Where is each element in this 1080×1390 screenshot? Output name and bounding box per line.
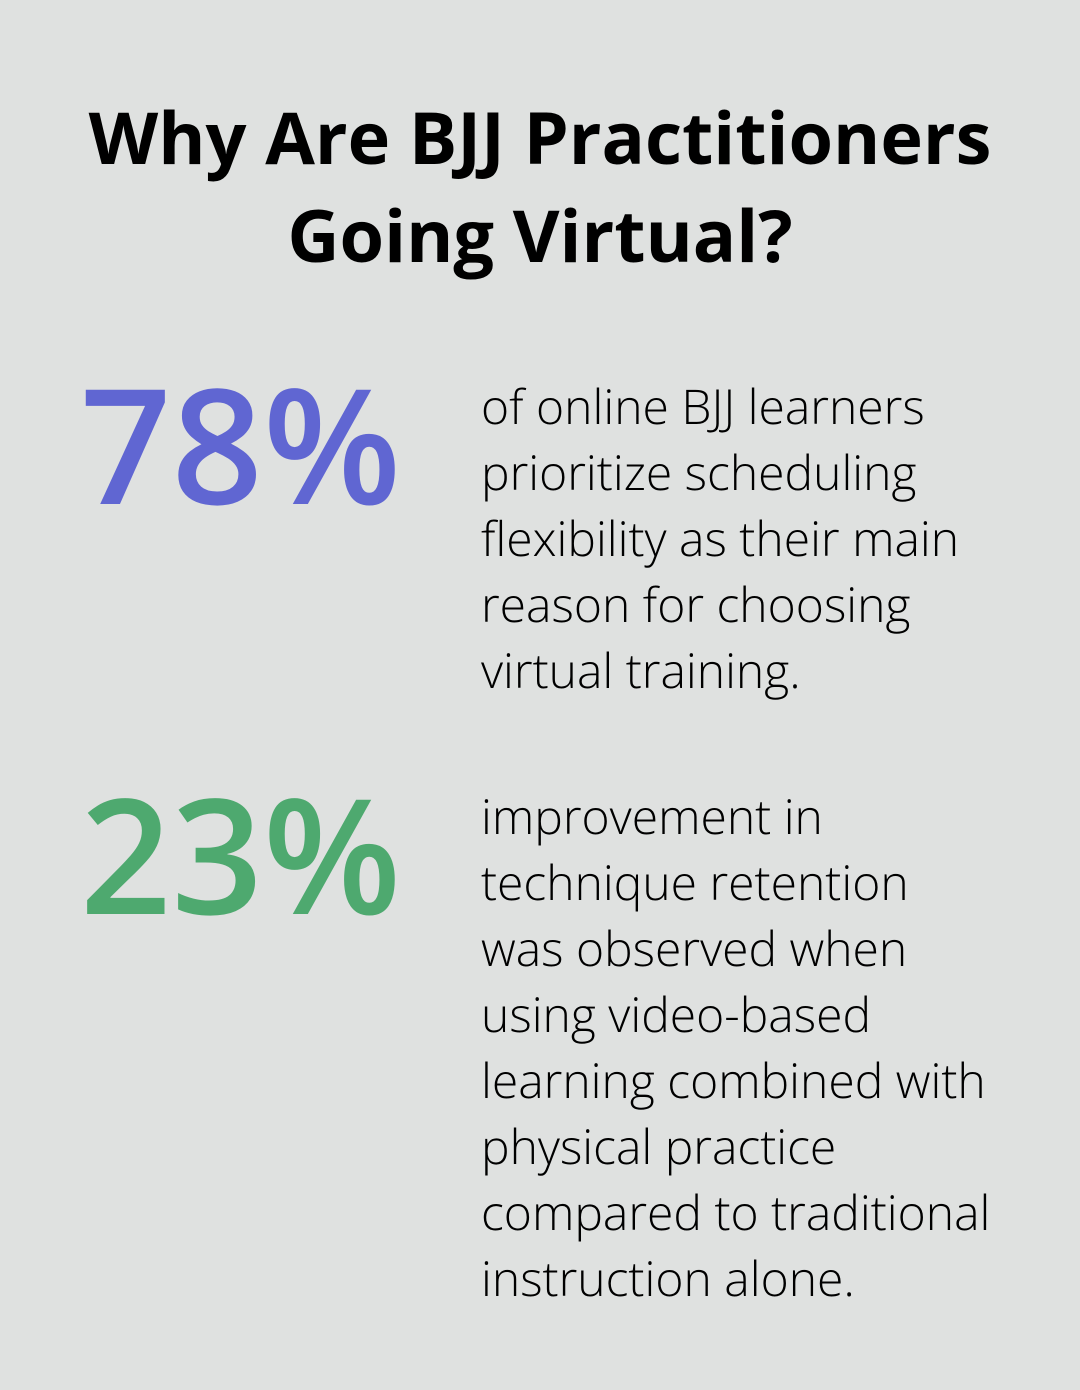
title: Going Virtual? — [287, 186, 793, 284]
stat: 78%: 78% — [80, 333, 401, 551]
text block: 23% description: improvement in — [481, 784, 823, 849]
text block: 23% description: physical practice — [481, 1114, 836, 1179]
text block: 23% description: using video-based — [481, 982, 871, 1047]
title: Why Are BJJ Practitioners — [89, 88, 991, 186]
text block: 78% description: of online BJJ learners — [481, 374, 925, 439]
text block: 78% description: prioritize scheduling — [481, 440, 916, 505]
stat: 23%: 23% — [80, 743, 401, 961]
text block: 23% description — [481, 784, 990, 1311]
text block: 78% description: flexibility as their main — [481, 506, 959, 571]
text block: 23% description: instruction alone. — [481, 1246, 855, 1311]
text block: 78% description: virtual training. — [481, 638, 801, 703]
text block: 78% description — [481, 374, 959, 703]
title — [88, 88, 991, 284]
text block: 23% description: technique retention — [481, 850, 909, 915]
text block: 78% description: reason for choosing — [481, 572, 910, 637]
text block: 23% description: learning combined with — [481, 1048, 986, 1113]
text block: 23% description: was observed when — [481, 916, 907, 981]
text block: 23% description: compared to traditional — [481, 1180, 990, 1245]
